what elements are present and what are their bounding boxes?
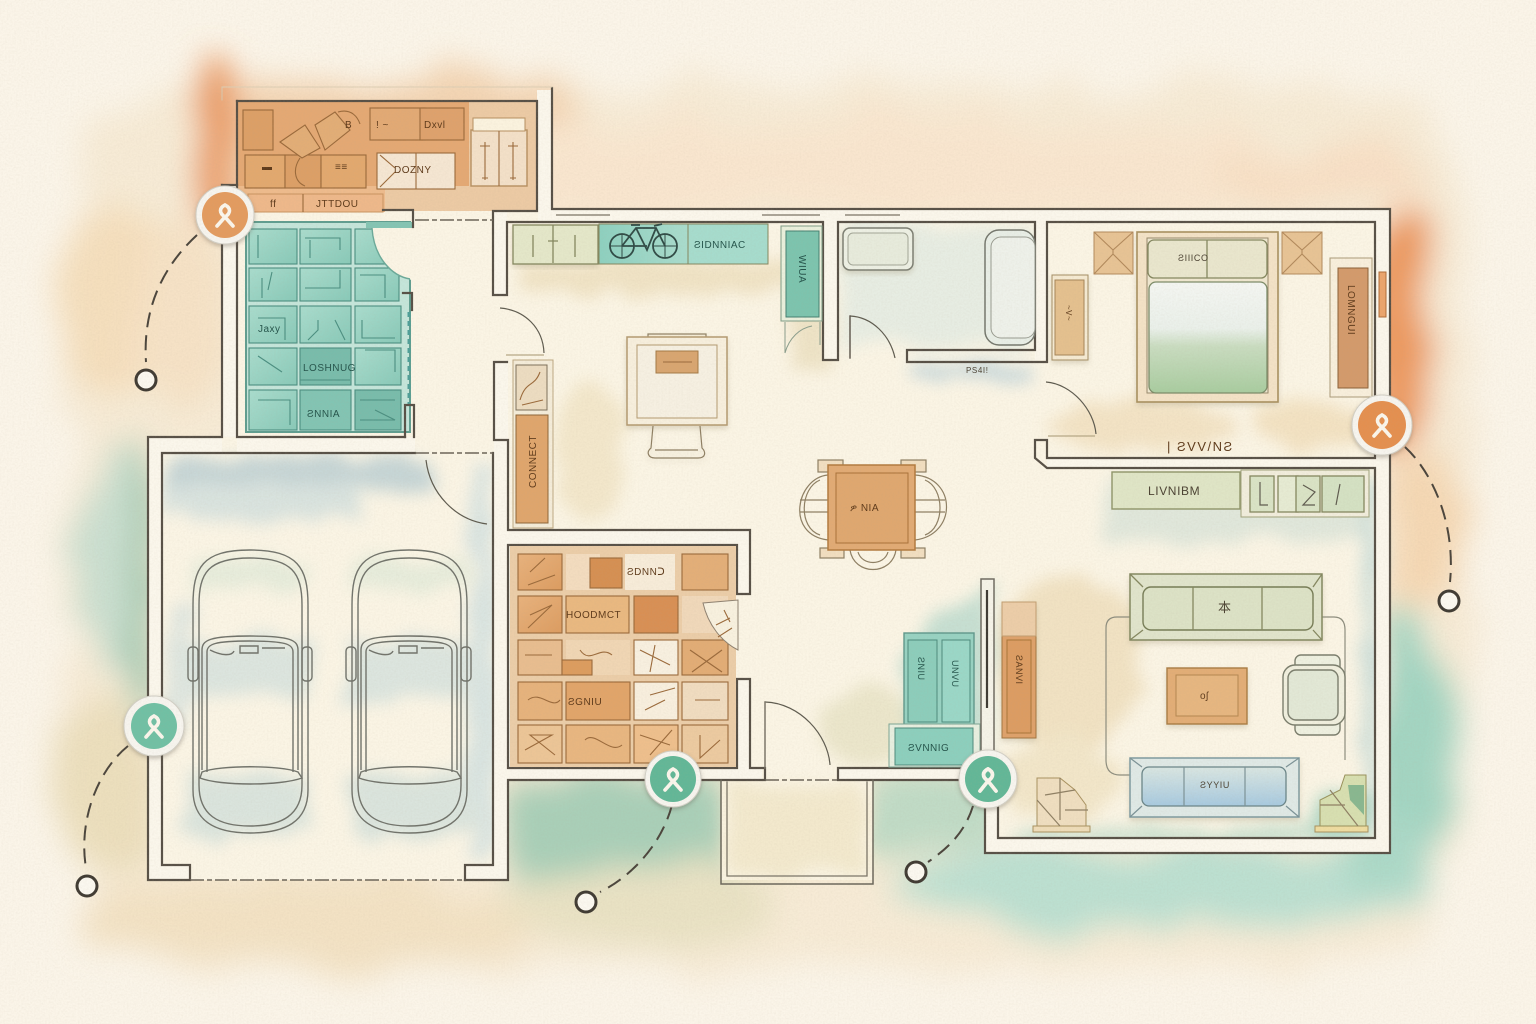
furniture: bedroom bench: ~V~	[1064, 305, 1073, 321]
furniture: bedroom dresser	[1330, 258, 1386, 397]
pale crate	[377, 153, 455, 189]
furniture: bathroom sofa	[843, 228, 913, 270]
furniture: teal labelled cabinet: ƧIDNNIAC	[694, 240, 746, 251]
furniture: corner plant left	[1033, 778, 1090, 832]
furniture: teal cabinet: ƧNIU	[916, 657, 926, 681]
marker: hall teal	[645, 751, 701, 807]
furniture: bathtub	[985, 230, 1035, 345]
bottom shelf strip	[248, 194, 383, 212]
furniture: nightstands	[1094, 232, 1322, 274]
furniture: green sofa	[1130, 574, 1322, 640]
furniture: green cabinet	[513, 225, 598, 264]
leader node top-left	[136, 370, 156, 390]
furniture: bedroom bed	[1137, 232, 1278, 402]
door swings	[500, 308, 1096, 768]
upper crates: Dxvl	[424, 120, 445, 131]
marker: bedroom orange	[1352, 395, 1412, 455]
shelf cells: LOSHNUG	[303, 363, 356, 374]
furniture: coffee table	[1167, 668, 1247, 724]
stacked boxes left: ≡≡	[335, 162, 348, 173]
furniture: teal labelled cabinet	[688, 224, 768, 264]
furniture: corner plant right	[1315, 775, 1368, 832]
shelf cells: ƧDNNᑐ	[627, 567, 665, 578]
panel: orange shelving room	[510, 546, 738, 767]
panel: teal shelving room	[246, 222, 412, 432]
marker: living teal	[959, 750, 1017, 808]
car left	[188, 550, 312, 833]
bottom shelf strip: JTTDOU	[316, 199, 358, 210]
wardrobe	[471, 118, 527, 186]
house floor silhouette	[148, 101, 1390, 880]
garage door swing	[426, 460, 487, 524]
leader node right	[1439, 591, 1459, 611]
dashed leader living	[928, 806, 973, 862]
leader node hall	[576, 892, 596, 912]
dashed leader right	[1405, 447, 1451, 582]
leader node garage	[77, 876, 97, 896]
furniture: bedroom bed: ƧIIICO	[1178, 253, 1209, 263]
furniture: bedroom bench	[1052, 275, 1088, 360]
dotted sliding edge	[408, 312, 410, 404]
furniture: orange console: ƧANVI	[1014, 655, 1024, 685]
shelf cells	[518, 554, 728, 763]
furniture: coffee table: oʃ	[1200, 691, 1209, 702]
stacked boxes left: ▬	[262, 162, 272, 173]
bedroom label: | ƧVV/NƧ	[1167, 439, 1234, 454]
door cut-out	[372, 222, 412, 280]
upper crates	[370, 108, 464, 140]
furniture: tall teal locker: WIUA	[796, 255, 807, 283]
divider wall	[981, 579, 994, 753]
furniture: desk and chair	[627, 334, 727, 458]
shelf cells	[249, 229, 401, 430]
walls	[148, 87, 1390, 884]
furniture: teal cabinet	[889, 633, 980, 767]
bathroom threshold label: PS4I!	[966, 366, 989, 375]
marker: garage teal	[124, 696, 184, 756]
furniture: dining table and chairs	[800, 460, 946, 570]
shelf cells: ƧNNIA	[307, 409, 340, 420]
panel: garage	[188, 460, 487, 833]
marker: storage orange	[196, 186, 254, 244]
furniture: green sideboard: LIVNIBM	[1148, 484, 1200, 498]
furniture: dining table and chairs: ዎ NIA	[850, 503, 879, 514]
furniture: green sofa: 本	[1218, 600, 1232, 615]
stacked boxes left: B	[345, 120, 352, 131]
furniture: teal cabinet: ƧVNNIG	[908, 743, 949, 754]
door leaf	[703, 600, 738, 650]
dashed leader garage	[84, 746, 128, 868]
furniture: left sketch unit: CONNECT	[528, 435, 539, 488]
icon: bicycle	[610, 224, 677, 258]
furniture: bicycle rack	[599, 224, 688, 264]
rug outline	[1106, 617, 1345, 775]
furniture: tall teal locker	[781, 226, 822, 353]
furniture: blue sofa: ƧYYIU	[1200, 780, 1230, 790]
car right	[346, 550, 471, 833]
shelf cells: Jaxy	[258, 324, 281, 335]
panel: storage room	[237, 101, 537, 212]
dashed leader top-left	[146, 235, 197, 362]
furniture: armchair	[1283, 655, 1345, 735]
upper crates: ! ~	[376, 120, 389, 131]
furniture: left sketch unit	[513, 360, 553, 528]
stacked boxes left	[243, 110, 366, 188]
furniture: teal cabinet: UNVU	[950, 660, 960, 688]
shelf cells: ƧGNIU	[568, 697, 602, 708]
furniture: orange console	[1002, 602, 1036, 738]
pale crate: DOZNY	[394, 165, 432, 176]
furniture: bedroom dresser: LOMNGUI	[1345, 285, 1356, 335]
shelf cells: HOODMCT	[566, 610, 621, 621]
furniture: blue sofa	[1130, 758, 1299, 817]
furniture: green sideboard	[1112, 470, 1369, 517]
interior watercolor washes	[163, 226, 1382, 875]
leader node living	[906, 862, 926, 882]
bottom shelf strip: ff	[270, 199, 276, 210]
dashed leader hall	[600, 805, 672, 892]
